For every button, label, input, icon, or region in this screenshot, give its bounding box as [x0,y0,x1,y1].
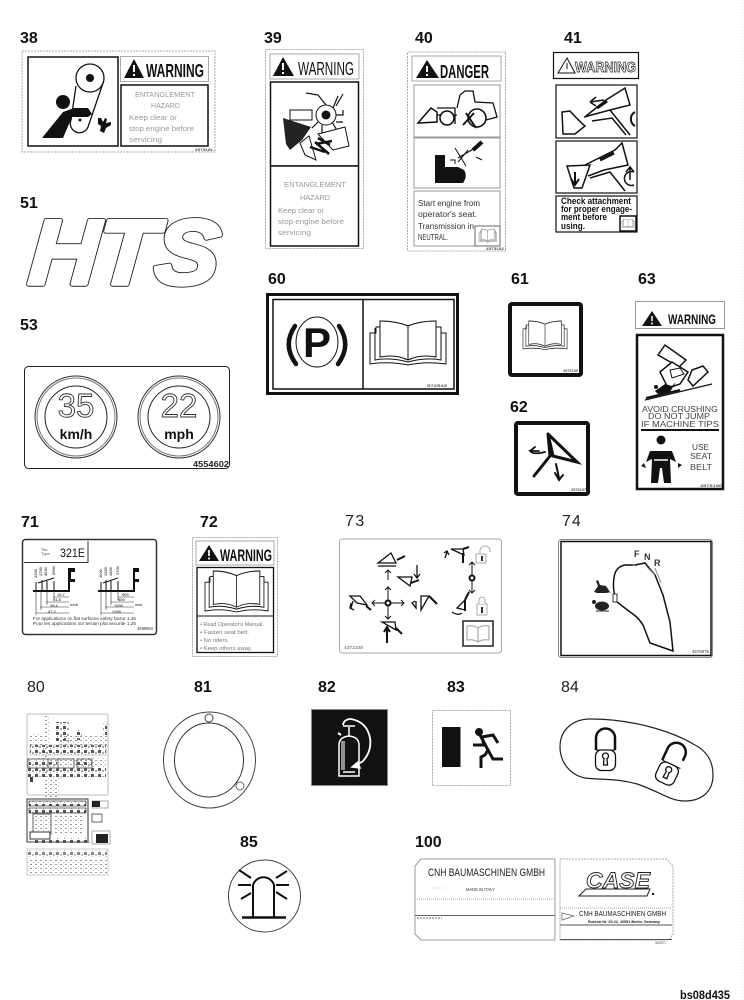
safety factor text: For applications on flat surfaces safety factor 1.25 [33,616,137,621]
label 41: 41 [564,30,582,47]
danger header: DANGER [440,62,489,82]
decal 80 [27,679,110,875]
label 85: 85 [240,834,258,851]
panel: instructions: • Keep others away. [200,646,252,652]
part number: 4575196 [700,483,723,488]
label 71: 71 [21,514,39,531]
safety factor text: 4599960 [137,626,153,631]
panel: screwdriver [414,138,500,188]
CASE logo: CASE [586,868,651,893]
part number: 4554602 [193,460,230,469]
panel: instructions: • Fasten seat belt. [200,630,250,636]
safety factor text: Pour les applications sur terrain plat securite 1.25 [33,621,137,626]
decal 71 [21,514,156,634]
HTS outline logo: H [26,202,105,304]
part number: 572543 [427,383,448,388]
panel: hazard text: HAZARD [300,195,330,202]
HTS outline logo: S [152,202,223,304]
hazard text box: Keep clear or [129,115,178,122]
seat belt text: USE [692,443,709,452]
load chart: lb: 19.7 [57,592,66,597]
icon: parking brake [289,317,345,367]
ring [164,712,256,808]
icon: rabbit [594,580,612,593]
seat belt text: BELT [690,463,712,472]
decal 38 [20,30,215,152]
icon: manual [523,321,567,350]
decal 83 [432,679,510,786]
load chart: lb: 2755 [38,566,43,576]
panel: instruction text: Transmission in [418,222,474,231]
load chart: mm: 2700 [115,565,120,575]
label 60: 60 [268,271,286,288]
decal 63 [636,271,724,489]
panel: instruction text: Start engine from [418,199,480,208]
warning header: WARNING [668,311,716,327]
gear marks: R [654,558,661,568]
label 74: 74 [562,513,582,530]
hazard text box [121,85,214,152]
load chart: mm: 1000 [114,603,124,608]
load chart: mm: 1250 [103,566,108,576]
hazard text box: HAZARD [151,103,180,110]
icon: belt entanglement [28,57,118,146]
load chart: mm: 1200 [112,609,122,614]
type box: Type [41,551,50,556]
decal 41 [554,30,638,232]
warning header: WARNING [146,61,204,81]
panel: hazard text: servicing [278,230,311,237]
label 100: 100 [415,834,442,851]
icon: running figure [473,728,503,768]
HTS outline logo: T [94,202,168,304]
km/h sign [35,376,117,458]
label 82: 82 [318,679,336,696]
part number: 4372108 [344,645,364,650]
hazard text box: servicing [129,137,162,144]
decal 85 [228,834,300,932]
panel: check text: Check attachment [561,196,631,206]
mph sign [138,376,220,458]
gear marks: N [644,552,650,562]
panel: attachment check [556,141,637,193]
label 73: 73 [345,513,366,530]
part number: 4575197 [571,487,587,492]
load chart: lb: 31.5 [53,597,62,602]
label 72: 72 [200,514,218,531]
bucket icons [350,547,469,643]
decal 40 [408,30,506,251]
load chart: mm: 1000 [98,568,103,578]
panel: hazard text: ENTANGLEMENT [284,182,347,189]
seat belt text: SEAT [690,452,712,461]
load chart: lb: 47.2 [48,609,57,614]
panel: instruction text [414,191,505,251]
load chart: mm: 500 [122,592,129,597]
label 62: 62 [510,399,528,416]
label 53: 53 [20,317,38,334]
mph sign: mph [164,426,194,442]
hazard text box: 4575181 [195,147,214,152]
decal 51 [20,195,223,304]
icon: exit door [442,727,460,767]
warning header [120,56,208,82]
panel: instruction text: 4575182 [486,246,505,251]
panel: hazard text: Keep clear or [278,208,325,215]
icon: machine tipping [645,345,712,400]
icon: fire extinguisher [338,719,370,776]
label 61: 61 [511,271,529,288]
panel: attachment locked [556,85,637,138]
decal 73 [340,513,502,653]
danger header [412,56,501,82]
label 80: 80 [27,679,45,696]
panel: hazard text: stop engine before [278,219,344,226]
padlocks [476,546,490,615]
left plate: MADE IN ITALY [466,887,495,892]
tipping text: DO NOT JUMP [648,412,710,421]
label 63: 63 [638,271,656,288]
warning header [554,52,638,78]
warning header [270,54,359,79]
mph sign: 22 [161,387,197,424]
tipping text: IF MACHINE TIPS [641,420,719,429]
type box: Tier [41,547,48,552]
km/h sign: 35 [58,387,94,424]
km/h sign: km/h [60,426,92,442]
label 84: 84 [561,679,579,696]
load chart: mm: mm [135,602,143,607]
panel: manual [197,568,274,652]
HTS outline logo: H [26,202,105,304]
panel: instructions: • Read Operator's Manual. [200,622,264,628]
icon: manual [370,321,446,365]
control pattern: cross arrows [372,570,404,619]
label 83: 83 [447,679,465,696]
right plate: Ruhrstr Nr. 20-22, 10551 Berlin, Germany [588,919,661,924]
load chart: lb: 4040 [43,566,48,576]
panel: check text: using. [561,221,585,231]
decal 39 [264,30,364,248]
panel: hazard text [270,166,358,246]
left plate [415,859,555,940]
panel: check text: ment before [561,212,607,222]
middle chart sheet [27,799,110,844]
icon: seat belt [641,436,682,483]
decal 100 [415,834,673,945]
panel: gear hazard [270,82,358,166]
icon: turtle [592,600,609,611]
gear marks [613,549,661,602]
label 81: 81 [194,679,212,696]
hazard text box: ENTANGLEMENT [135,92,196,99]
decal 84 [560,679,713,801]
tipping text [641,405,719,429]
top chart sheet [27,714,108,799]
load chart: lb: 39.4 [50,603,59,608]
left plate: CNH BAUMASCHINEN GMBH [428,867,545,879]
icon: beacon [238,870,289,918]
panel: check text [556,196,637,232]
decal 53 [20,317,230,469]
decal 60 [268,271,458,394]
right plate: CNH BAUMASCHINEN GMBH [579,911,666,918]
blob outline [560,719,713,801]
load chart: mm: 800 [118,597,125,602]
icon: locked padlock [596,729,616,770]
icon: parking brake: P [303,319,331,366]
warning header: WARNING [220,546,272,565]
warning header [636,302,724,328]
warning header [196,541,274,565]
right plate: 4320071 [655,941,666,945]
load chart: lb [33,565,79,615]
seat belt text [690,443,712,472]
label 40: 40 [415,30,433,47]
label 39: 39 [264,30,282,47]
safety factor text [33,616,153,631]
hazard text box: stop engine before [129,126,194,133]
right plate [560,859,673,945]
load chart: lb: 5950 [51,565,56,575]
panel: check text: for proper engage- [561,204,632,214]
HTS outline logo: S [152,202,223,304]
load chart: mm [98,565,143,615]
load chart: lb: inch [70,602,79,607]
decal 61 [510,271,581,375]
HTS outline logo: T [94,202,168,304]
panel: instructions [200,622,264,652]
decal 82 [312,679,388,786]
warning header: WARNING [298,59,354,79]
load chart: lb: 2205 [33,568,38,578]
control outline [613,563,673,651]
panel: instruction text: operator's seat. [418,210,477,219]
part number: 4575195 [563,368,579,373]
label 38: 38 [20,30,38,47]
bottom chart sheet [27,849,108,875]
load chart: mm: 1830 [108,566,113,576]
warning header: WARNING [575,59,636,76]
sticker frame [268,294,458,394]
decal 74 [558,513,712,658]
manual box [463,621,493,646]
decal 81 [164,679,256,808]
icon: unlocked padlock [654,740,690,787]
decal 72 [192,514,278,656]
gear marks: F [634,549,640,559]
sticker 38 frame [22,51,215,152]
panel: loader [414,85,500,137]
page edge [742,0,744,1000]
lock arrow [469,562,475,593]
label 51: 51 [20,195,38,212]
type box [24,541,88,562]
type box: 321E [60,546,85,560]
HTS outline logo [26,202,223,304]
decal 62 [510,399,588,494]
panel: instructions: • No riders. [200,638,229,644]
icon: boom movement [530,434,577,480]
part number: 4576975 [692,649,709,654]
panel: instruction text: NEUTRAL. [418,233,448,242]
tipping text: AVOID CRUSHING [642,405,718,414]
